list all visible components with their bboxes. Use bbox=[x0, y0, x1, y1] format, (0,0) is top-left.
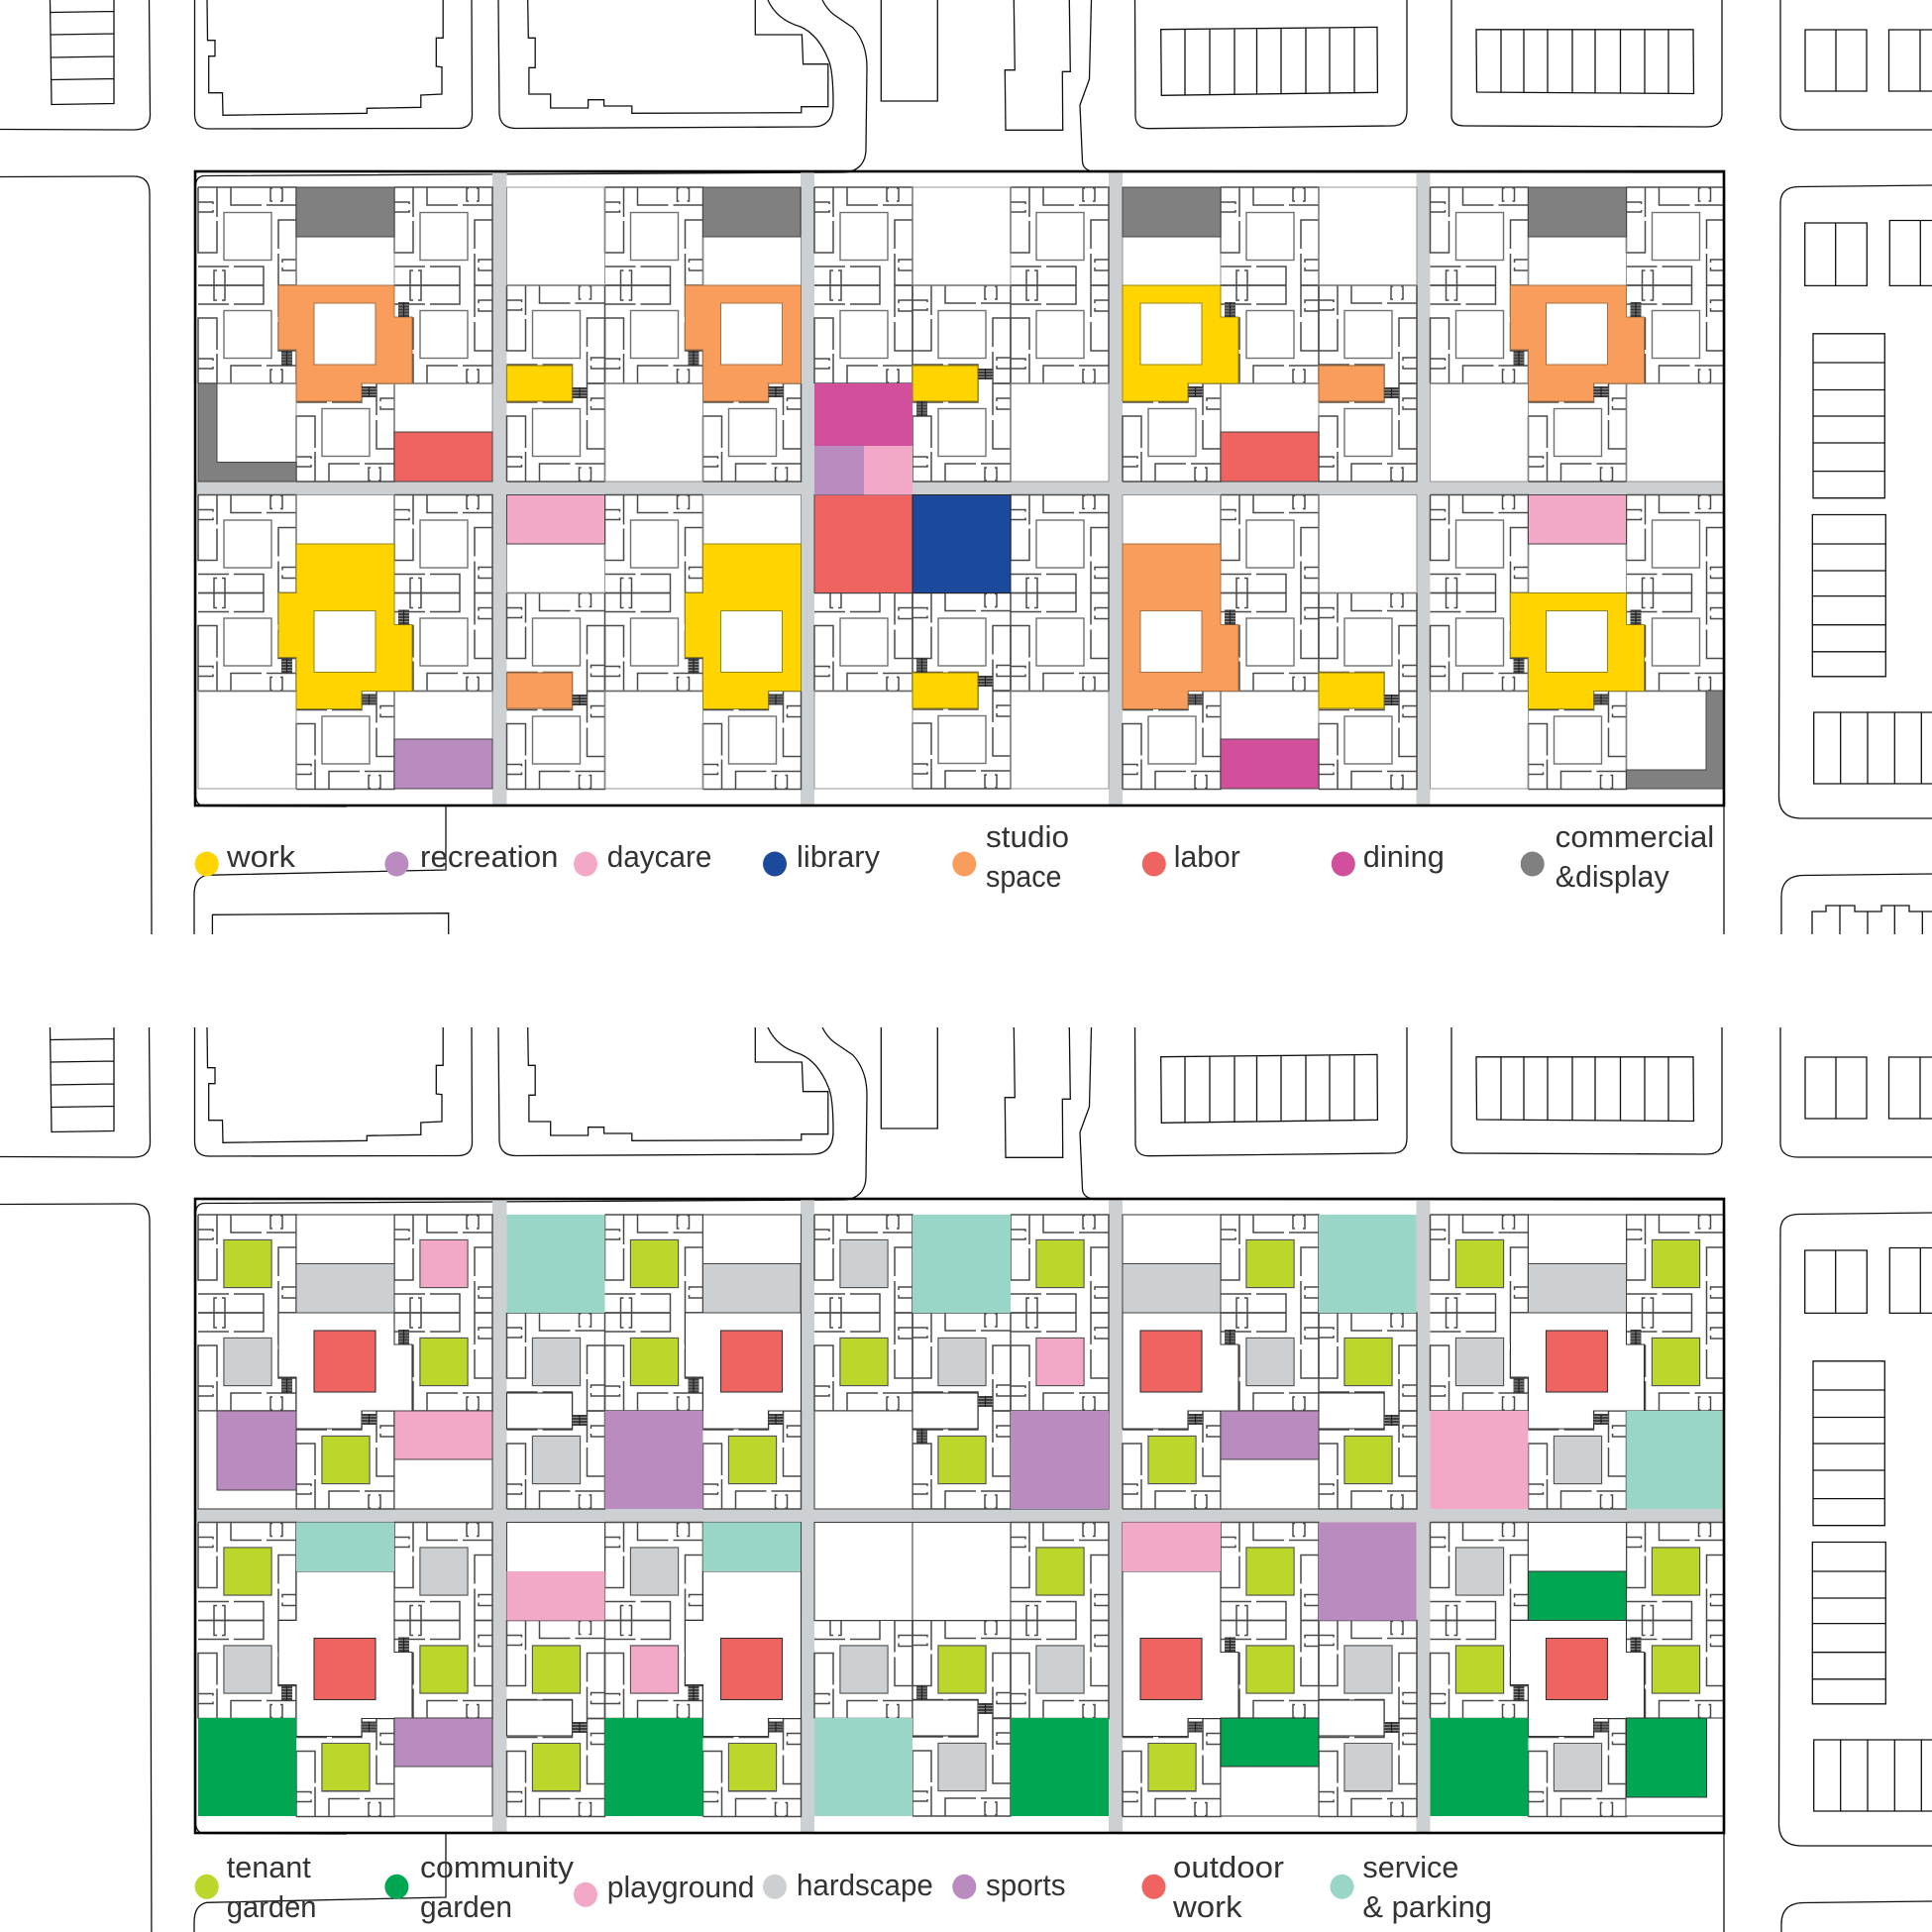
service and parking lots bbox=[296, 1215, 1724, 1816]
small white wing units bbox=[507, 1393, 1399, 1736]
site context: streets and neighbouring buildings bbox=[0, 1027, 1932, 1932]
legend item: service and parking: & parking bbox=[1362, 1889, 1492, 1924]
courtyard rings: studio space and work bbox=[278, 285, 1645, 709]
plan frame bbox=[195, 171, 1724, 805]
site context: streets and neighbouring buildings bbox=[0, 0, 1932, 934]
hardscape lots bbox=[296, 1264, 1627, 1313]
thin outlines of open lots bbox=[198, 187, 1724, 789]
legend item: commercial and display: commercial bbox=[1556, 819, 1714, 854]
legend item: recreation: recreation bbox=[420, 839, 559, 874]
central block: dining, recreation, daycare, library bbox=[814, 383, 1011, 592]
legend item: studio space: space bbox=[986, 859, 1062, 894]
legend item: work bbox=[195, 839, 296, 876]
legend item: playground: playground bbox=[607, 1870, 755, 1904]
legend item: daycare bbox=[574, 839, 711, 876]
empty lots bbox=[198, 1215, 1724, 1816]
commercial and display blocks bbox=[198, 187, 1724, 789]
legend item: sports bbox=[952, 1868, 1066, 1902]
recreation, dining and daycare blocks bbox=[394, 495, 1627, 789]
panel: open space plan (gardens and outdoor uses) bbox=[0, 1027, 1932, 1932]
legend item: outdoor work bbox=[1141, 1850, 1284, 1924]
legend item: tenant garden bbox=[195, 1850, 317, 1924]
legend item: commercial and display bbox=[1521, 819, 1714, 894]
playground lots bbox=[394, 1411, 1528, 1621]
legend item: studio space: studio bbox=[986, 819, 1069, 854]
legend item: community garden: community bbox=[420, 1850, 575, 1884]
legend item: library bbox=[763, 839, 880, 876]
legend item: tenant garden: garden bbox=[227, 1889, 317, 1924]
courtyards: playground bbox=[420, 1240, 1084, 1693]
legend: programme uses bbox=[195, 819, 1714, 894]
small wing units: work and studio bbox=[507, 366, 1399, 708]
legend item: daycare: daycare bbox=[607, 839, 711, 874]
community garden lots bbox=[198, 1571, 1706, 1816]
legend item: studio space bbox=[952, 819, 1069, 894]
sports lots bbox=[217, 1411, 1417, 1767]
legend item: community garden: garden bbox=[420, 1889, 512, 1924]
legend item: labor: labor bbox=[1174, 839, 1240, 874]
legend item: labor bbox=[1142, 839, 1240, 876]
legend item: outdoor work: outdoor bbox=[1173, 1850, 1284, 1884]
legend item: commercial and display: &display bbox=[1556, 859, 1669, 894]
courtyards: tenant gardens bbox=[224, 1240, 1700, 1791]
legend item: sports: sports bbox=[986, 1868, 1066, 1902]
legend item: tenant garden: tenant bbox=[227, 1850, 311, 1884]
legend item: dining bbox=[1332, 839, 1445, 876]
legend item: outdoor work: work bbox=[1172, 1889, 1242, 1924]
legend item: dining: dining bbox=[1363, 839, 1445, 874]
labor blocks bbox=[394, 432, 1319, 592]
plan frame bbox=[195, 1199, 1724, 1833]
legend item: service and parking bbox=[1330, 1850, 1492, 1924]
base plan: roads and apartment modules bbox=[195, 171, 1724, 805]
panel: programme plan (work and shared uses) bbox=[0, 0, 1932, 934]
legend item: community garden bbox=[384, 1850, 575, 1924]
legend item: work: work bbox=[226, 839, 296, 874]
courtyard rings with outdoor work squares bbox=[278, 1313, 1645, 1736]
courtyards: hardscape bbox=[224, 1240, 1601, 1791]
legend item: library: library bbox=[797, 839, 880, 874]
legend item: hardscape: hardscape bbox=[797, 1868, 933, 1902]
legend: open space uses bbox=[195, 1850, 1492, 1924]
legend item: service and parking: service bbox=[1362, 1850, 1458, 1884]
base plan: roads and apartment modules bbox=[195, 1199, 1724, 1833]
